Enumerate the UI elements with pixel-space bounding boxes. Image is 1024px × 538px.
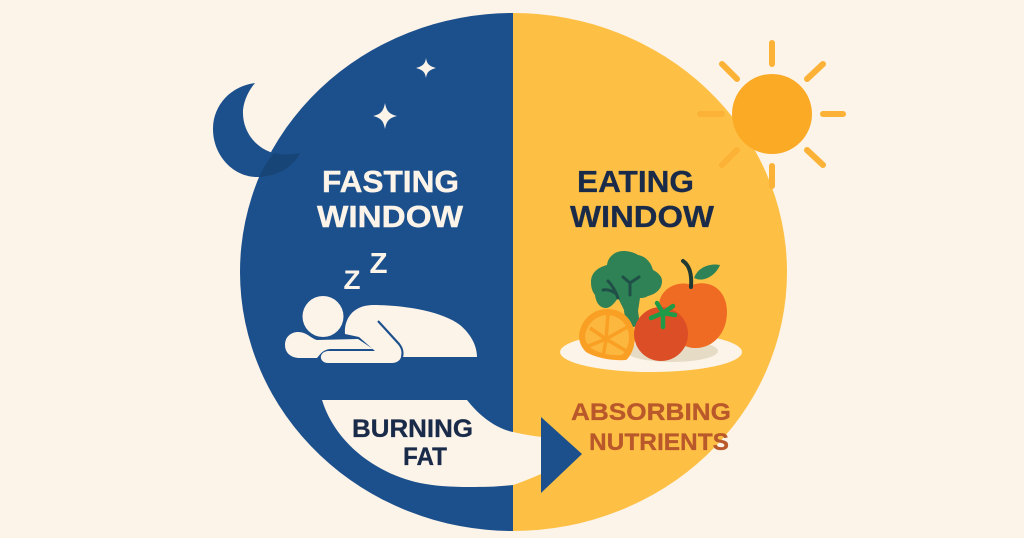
apple [659, 261, 727, 348]
heading: fasting window [317, 165, 463, 234]
orange slice [579, 309, 635, 360]
heading: eating window: WINDOW [570, 200, 714, 234]
label: burning fat: BURNING [352, 415, 473, 443]
icon: sleeping zzz: Z [344, 265, 360, 295]
arrow: fat burning to nutrients [322, 400, 582, 493]
icon: sun [700, 43, 843, 186]
icon: food plate [560, 251, 742, 372]
plate [560, 332, 742, 372]
tomato [634, 303, 688, 361]
heading: eating window [570, 165, 714, 234]
heading: fasting window: WINDOW [317, 200, 463, 234]
icon: small star [416, 58, 436, 78]
moon overlap [259, 153, 300, 177]
panel: eating half [513, 13, 787, 531]
label: burning fat: FAT [403, 443, 447, 471]
heading: fasting window: FASTING [322, 165, 459, 199]
broccoli [591, 251, 662, 328]
heading: eating window: EATING [577, 165, 694, 199]
icon: sleeping person [285, 296, 477, 363]
icon: large star [373, 103, 397, 129]
icon: sleeping zzz: Z [370, 248, 388, 280]
label: absorbing nutrients: ABSORBING [571, 399, 731, 426]
label: absorbing nutrients: NUTRIENTS [589, 429, 729, 456]
icon: crescent moon [213, 83, 300, 177]
label: burning fat [352, 415, 473, 471]
icon: sleeping zzz [344, 248, 388, 295]
panel: fasting half [240, 13, 513, 531]
label: absorbing nutrients [571, 399, 731, 456]
